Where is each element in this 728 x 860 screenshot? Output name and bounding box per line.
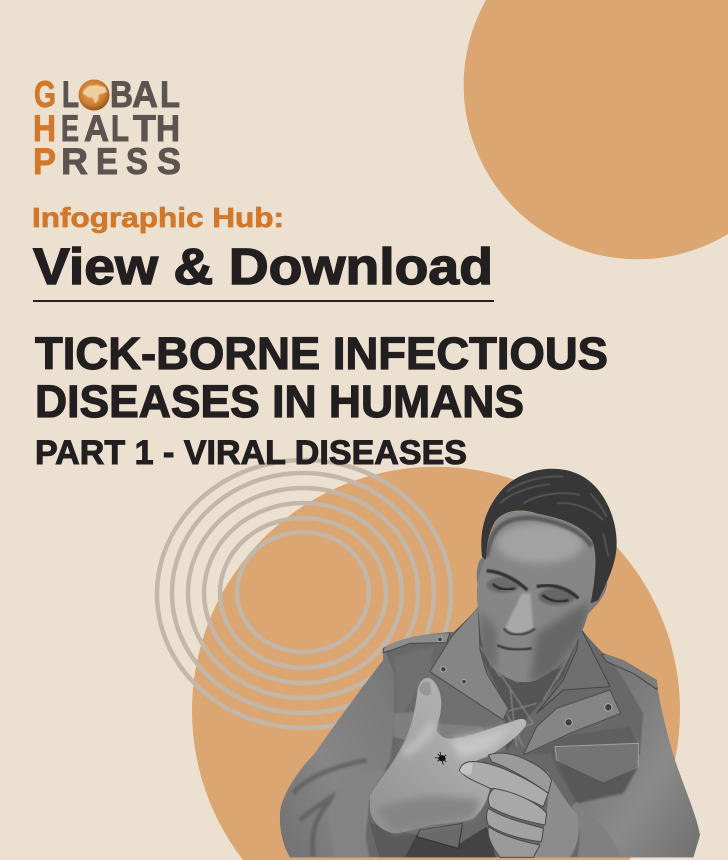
jacket: right collar (537, 627, 610, 713)
nose highlight (505, 593, 533, 635)
logo line: PRESS: R (61, 141, 88, 182)
fifth finger (488, 827, 540, 857)
title line 1: TICK-BORNE INFECTIOUS (35, 328, 608, 379)
right hand (459, 753, 579, 857)
pointing finger (459, 761, 548, 807)
jacket: left collar (430, 607, 508, 720)
jacket: below pocket (557, 760, 638, 803)
photo: man inspecting a tick on his hand (270, 469, 710, 860)
fingernail (460, 763, 473, 775)
jacket: left chest (394, 647, 510, 753)
decorative circle: top right (464, 0, 728, 259)
jacket: sleeve shading (293, 760, 367, 857)
plaid shirt (480, 635, 576, 752)
logo line: PRESS: S (126, 141, 148, 182)
heading underline (33, 300, 494, 302)
jacket: left pocket flap (394, 712, 483, 740)
heading: View & Download: View & Download (33, 238, 493, 295)
jacket (270, 600, 710, 860)
jacket: left cuff (332, 770, 386, 858)
logo line: HEALTH: L (111, 108, 129, 149)
jacket: pocket flap (555, 743, 638, 782)
logo line: HEALTH: E (61, 108, 79, 149)
title line 2: DISEASES IN HUMANS (35, 376, 524, 427)
jacket: left sleeve (270, 647, 394, 860)
right cheek shadow (530, 600, 590, 683)
left cheek shadow (480, 610, 497, 673)
subtitle: Part 1: PART 1 - VIRAL DISEASES (35, 434, 467, 472)
jacket: right cuff (572, 802, 619, 858)
jacket: lower center (370, 823, 497, 860)
right eye socket (538, 588, 575, 605)
nose shadow (504, 628, 535, 635)
logo line: PRESS (33, 141, 181, 182)
right eye (543, 595, 568, 601)
logo line: PRESS: S (157, 141, 181, 182)
logo line: HEALTH: H (33, 108, 56, 149)
jacket: buttons (438, 637, 612, 726)
jacket: front placket (523, 690, 621, 755)
logo line: GLOBAL: A (132, 74, 158, 115)
third finger (488, 788, 547, 825)
logo line: HEALTH: H (156, 108, 180, 149)
jacket: right epaulette (602, 652, 660, 689)
face (476, 511, 596, 682)
logo icon: globe (78, 80, 110, 110)
forehead highlight (497, 523, 583, 563)
right ear (585, 583, 607, 617)
left eyebrow (487, 571, 527, 590)
hair (481, 469, 617, 603)
right eyebrow (537, 585, 578, 598)
fourth finger (487, 808, 543, 842)
subheading: Infographic Hub: Infographic Hub: (32, 202, 284, 233)
logo line: HEALTH (33, 108, 180, 149)
logo line: GLOBAL: L (160, 74, 180, 115)
logo: Global Health Press (33, 74, 181, 182)
hairline shadow (487, 518, 592, 557)
upper finger (488, 753, 552, 793)
logo line: PRESS: P (33, 141, 56, 182)
logo line: HEALTH: A (84, 108, 109, 149)
left hand (370, 678, 526, 833)
left eye (493, 584, 515, 589)
mouth (497, 645, 532, 650)
tick on hand (435, 752, 446, 765)
concentric rings (157, 460, 451, 728)
logo line: GLOBAL: G (34, 74, 56, 115)
jacket: left epaulette (383, 633, 450, 653)
jacket: lower right panel (530, 728, 640, 782)
logo line: PRESS: E (96, 141, 118, 182)
logo line: GLOBAL (34, 74, 180, 115)
logo line: GLOBAL: L (62, 74, 79, 115)
left ear (477, 557, 486, 589)
hand back (533, 770, 579, 857)
decorative circle: bottom (192, 467, 680, 860)
left eye socket (487, 577, 520, 593)
jacket: right sleeve (579, 654, 700, 858)
logo line: GLOBAL: B (110, 74, 133, 115)
logo line: HEALTH: T (133, 108, 156, 149)
title block (35, 328, 608, 472)
